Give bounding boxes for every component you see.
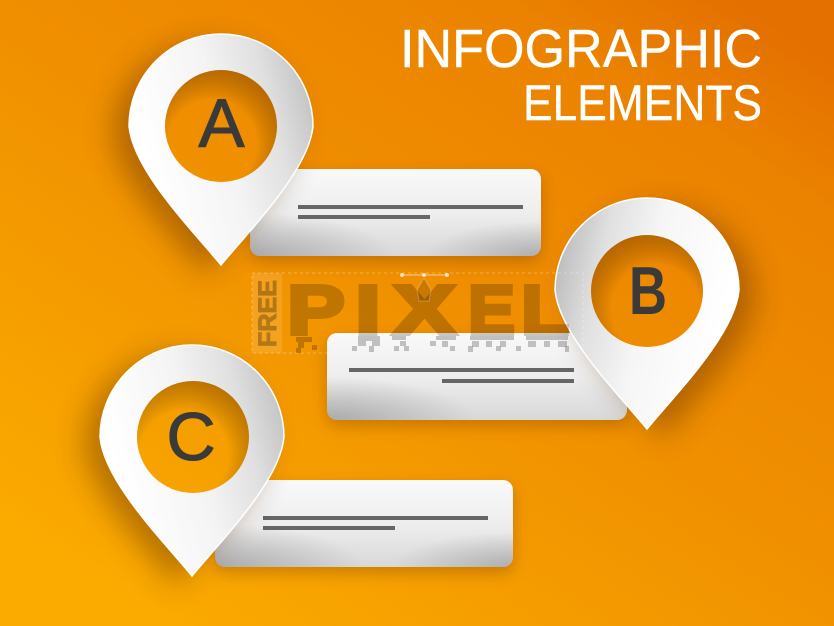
- icon: location pin B: [555, 198, 755, 439]
- text placeholder lines B: [349, 368, 574, 383]
- watermark: E: [468, 271, 515, 349]
- watermark: P: [287, 271, 345, 349]
- text placeholder lines A: [298, 205, 523, 219]
- title: [400, 19, 762, 131]
- text placeholder lines C: [263, 516, 488, 530]
- panel: card C: [215, 480, 513, 573]
- letter B: B: [629, 253, 667, 329]
- icon: location pin A: [113, 34, 313, 275]
- watermark: L: [521, 271, 569, 349]
- panel: card B: [327, 333, 627, 426]
- letter C: C: [166, 399, 216, 475]
- letter A: A: [198, 85, 245, 162]
- title: ELEMENTS: [523, 75, 762, 131]
- icon: location pin C: [84, 345, 284, 586]
- watermark: FREE: [254, 280, 282, 347]
- title: INFOGRAPHIC: [400, 19, 762, 79]
- panel: card A: [250, 169, 541, 262]
- watermark: [252, 271, 583, 353]
- watermark: I: [355, 271, 381, 349]
- watermark: X: [393, 271, 456, 349]
